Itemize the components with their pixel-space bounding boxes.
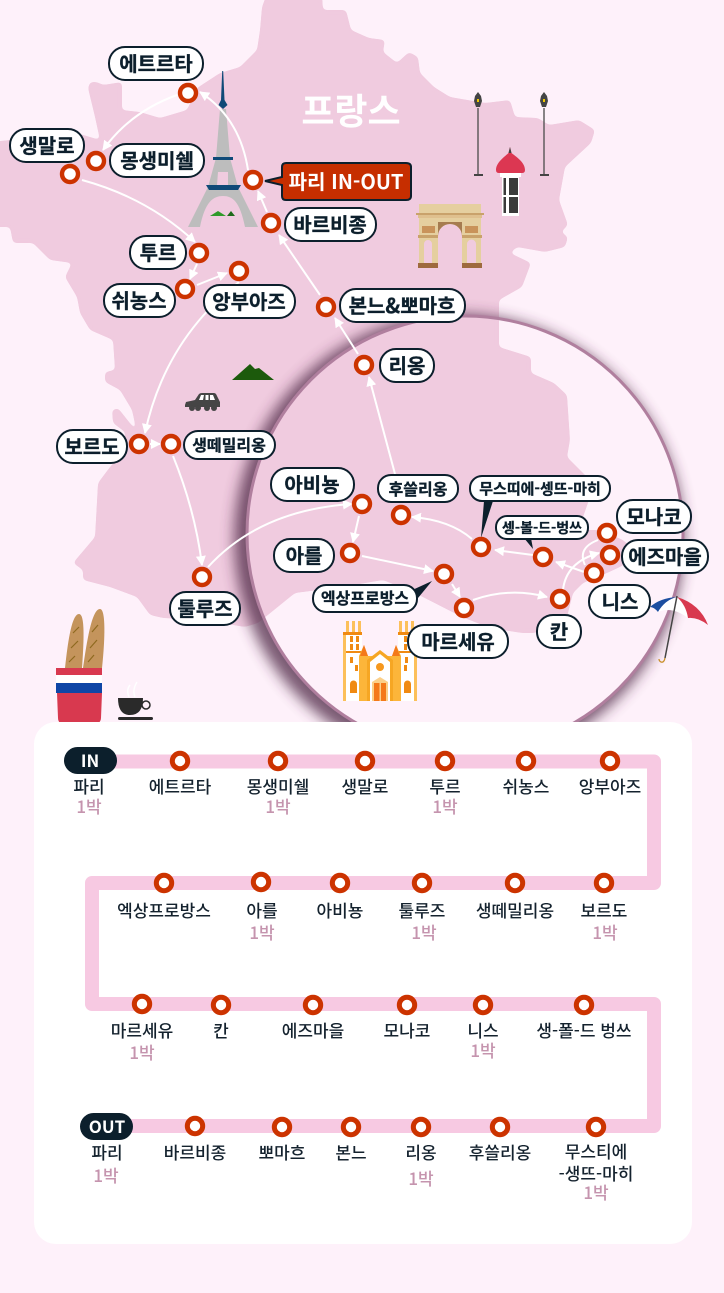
label: Nice: 니스 — [602, 586, 638, 615]
label: Mont Saint-Michel: 몽생미쉘 — [120, 145, 194, 174]
icon: cathedral — [343, 621, 417, 701]
label: Marseille — [408, 625, 508, 658]
label: Lyon: 리옹 — [389, 350, 425, 379]
row 3 stops — [111, 996, 632, 1064]
row 4 stops: 1박 — [93, 1162, 119, 1187]
label: Amboise: 앙부아즈 — [212, 286, 286, 315]
icon: umbrella — [650, 596, 708, 662]
callout pointers — [408, 501, 533, 598]
icon: baguettes in basket — [56, 609, 104, 723]
row 1 stops: 투르 — [429, 773, 461, 798]
label: Paris IN-OUT callout: 파리 IN-OUT — [288, 166, 404, 195]
row 4 stops: 후쓸리옹 — [469, 1139, 531, 1164]
label: Chinon — [104, 284, 175, 317]
row 1 stops: 생말로 — [342, 773, 388, 798]
label: Etretat: 에트르타 — [119, 48, 193, 77]
row 4 stops: 1박 — [408, 1165, 434, 1190]
label: Nice — [589, 585, 650, 618]
label: Beaune and Beaumarchais: 본느&뽀마흐 — [349, 290, 455, 319]
label: Bordeaux — [57, 430, 127, 463]
icon: Eiffel tower — [188, 71, 258, 227]
row 1 stops: 쉬농스 — [503, 773, 549, 798]
magnified circle: southern France — [224, 304, 695, 722]
label: Monaco — [617, 500, 691, 533]
label: Paris IN-OUT callout — [265, 163, 411, 200]
icon: car — [185, 393, 220, 411]
label: Roussillon: 후쓸리옹 — [389, 476, 448, 500]
label: Tours: 투르 — [140, 237, 176, 266]
icon: mountain — [232, 364, 274, 380]
row 4 stops: -생뜨-마히 — [559, 1160, 633, 1185]
label: Etretat — [109, 47, 203, 80]
row 2 stops: 1박 — [249, 919, 275, 944]
label: Toulouse — [170, 592, 240, 625]
row 4 stops: 1박 — [583, 1179, 609, 1204]
title: France: 프랑스 — [301, 83, 401, 135]
row 4 stops: 파리 — [91, 1139, 123, 1164]
row 2 stops: 1박 — [592, 919, 618, 944]
badge: IN — [64, 747, 117, 774]
icon: street lamp right — [540, 92, 549, 176]
label: Roussillon — [378, 475, 458, 502]
row 1 stops: 앙부아즈 — [579, 773, 641, 798]
icon: Arc de Triomphe — [416, 204, 484, 268]
label: Monaco: 모나코 — [626, 501, 682, 530]
row 3 stops: 1박 — [470, 1037, 496, 1062]
row 3 stops: 생-폴-드 벙쓰 — [536, 1017, 632, 1042]
label: Saint-Emilion — [184, 431, 275, 459]
row 1 stops: 에트르타 — [149, 773, 212, 798]
label: Mont Saint-Michel — [110, 144, 204, 177]
row 4 stops: 리옹 — [405, 1139, 437, 1164]
row 2 stops: 아를 — [246, 897, 278, 922]
label: Arles — [274, 539, 334, 572]
panel: itinerary — [34, 722, 692, 1244]
row 4 stops: 본느 — [335, 1139, 367, 1164]
route arrows on map — [82, 92, 599, 600]
route line — [92, 762, 654, 1126]
label: Cannes — [537, 615, 581, 648]
row 2 stops: 생떼밀리옹 — [476, 897, 554, 922]
row 4 stops: 바르비종 — [164, 1139, 226, 1164]
row 1 stops: 몽생미쉘 — [247, 773, 309, 798]
label: Barbizon: 바르비종 — [293, 209, 367, 238]
row 1 stops: 1박 — [76, 793, 102, 818]
row 4 stops — [91, 1118, 633, 1204]
row 2 stops: 보르도 — [581, 897, 627, 922]
row 1 stops: 1박 — [265, 793, 291, 818]
label: Avignon: 아비뇽 — [284, 469, 340, 498]
row 4 stops: 무스티에 — [565, 1138, 627, 1163]
label: Aix-en-Provence: 엑상프로방스 — [321, 585, 409, 609]
icon: domed tower — [496, 147, 525, 216]
row 2 stops: 툴루즈 — [399, 897, 445, 922]
row 4 stops: 뽀마흐 — [259, 1139, 305, 1164]
label: Arles: 아를 — [286, 540, 322, 569]
row 1 stops — [73, 753, 641, 818]
label: Lyon — [380, 349, 434, 382]
label: Cannes: 칸 — [550, 616, 568, 645]
row 3 stops: 니스 — [467, 1017, 499, 1042]
stop markers on map — [62, 85, 618, 616]
row 3 stops: 1박 — [129, 1039, 155, 1064]
row 3 stops: 마르세유 — [111, 1017, 173, 1042]
label: Saint-Malo: 생말로 — [19, 130, 75, 159]
label: Saint-Emilion: 생떼밀리옹 — [192, 432, 266, 456]
row 3 stops: 에즈마을 — [282, 1017, 344, 1042]
label: Marseille: 마르세유 — [421, 626, 495, 655]
label: Toulouse: 툴루즈 — [177, 593, 233, 622]
row 3 stops: 모나코 — [384, 1017, 430, 1042]
badge: OUT: OUT — [89, 1113, 126, 1138]
label: Moustiers-Sainte-Marie: 무스띠에-셍뜨-마히 — [479, 478, 601, 499]
badge: OUT — [80, 1113, 133, 1140]
label: Saint-Malo — [10, 129, 84, 162]
label: Saint-Paul-de-Vence: 셍-볼-드-벙쓰 — [502, 518, 582, 538]
row 1 stops: 1박 — [432, 793, 458, 818]
label: Bordeaux: 보르도 — [64, 431, 120, 460]
badge: IN: IN — [81, 747, 99, 772]
label: Chinon: 쉬농스 — [111, 285, 167, 314]
icon: street lamp left — [474, 92, 483, 176]
row 3 stops: 칸 — [213, 1017, 229, 1042]
label: Avignon — [271, 468, 354, 501]
row 2 stops: 아비뇽 — [317, 897, 363, 922]
row 2 stops: 엑상프로방스 — [117, 897, 211, 922]
label: Eze: 에즈마을 — [628, 541, 702, 570]
icon: coffee cup — [118, 682, 153, 720]
row 1 stops: 파리 — [73, 773, 105, 798]
map: France — [0, 0, 640, 633]
row 2 stops — [117, 874, 627, 944]
row 2 stops: 1박 — [411, 919, 437, 944]
label: Tours — [130, 236, 186, 269]
